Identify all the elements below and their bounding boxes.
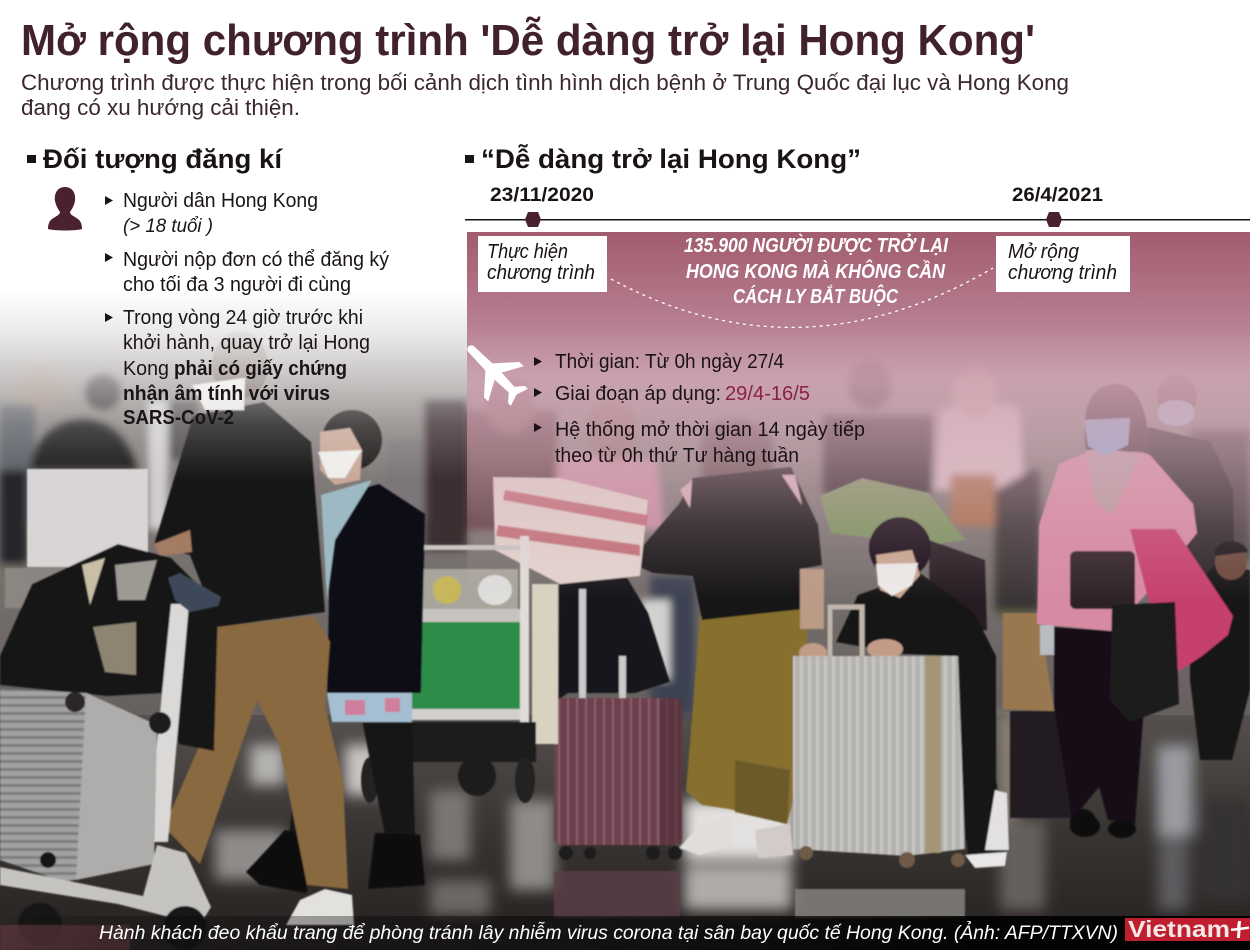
subtitle: Chương trình được thực hiện trong bối cảnh dịch tình hình dịch bệnh ở Trung Quốc đại lục và Hong Kong bbox=[21, 70, 1069, 95]
programme details text: Giai đoạn áp dụng: bbox=[555, 383, 721, 405]
programme details text: Hệ thống mở thời gian 14 ngày tiếp bbox=[555, 419, 865, 441]
timeline: 23/11/2020 bbox=[490, 185, 594, 206]
caption: Hành khách đeo khẩu trang để phòng tránh lây nhiễm virus corona tại sân bay quốc tế Hong Kong. (Ảnh: AFP/TTXVN) bbox=[99, 922, 1118, 944]
green blanket and dark luggage bbox=[820, 478, 965, 545]
man shirt and pants bbox=[164, 616, 348, 889]
trolley bbox=[147, 604, 189, 842]
black shopping bag bbox=[1110, 602, 1179, 722]
subtitle: đang có xu hướng cải thiện. bbox=[21, 95, 300, 120]
eligibility text: Trong vòng 24 giờ trước khi bbox=[123, 307, 363, 329]
callout: Mở rộng chương trình bbox=[996, 236, 1130, 292]
white box bbox=[27, 469, 148, 567]
blurred crowd behind bbox=[0, 361, 1250, 715]
cart, boxes and signs bbox=[532, 584, 558, 744]
left silver suitcase bbox=[0, 689, 157, 882]
callout: Mở rộng chương trình: chương trình bbox=[1008, 262, 1117, 284]
eligibility text: cho tối đa 3 người đi cùng bbox=[123, 274, 351, 296]
magenta coat bbox=[1130, 529, 1233, 671]
bullet triangles bbox=[105, 196, 113, 322]
girl bbox=[362, 720, 415, 835]
callout: Thực hiện chương trình: chương trình bbox=[487, 262, 595, 284]
heading: Đối tượng đăng kí: Đối tượng đăng kí bbox=[43, 144, 284, 174]
callout: 135.900 people: HONG KONG MÀ KHÔNG CẦN bbox=[686, 259, 945, 283]
cardboard box bbox=[1003, 613, 1054, 711]
heading: Dễ dàng trở lại Hong Kong: “Dễ dàng trở lại Hong Kong” bbox=[481, 143, 861, 174]
callout: 135.900 people bbox=[684, 233, 948, 308]
panel: Dễ dàng trở lại Hong Kong bbox=[451, 143, 1250, 467]
callout: Thực hiện chương trình bbox=[478, 236, 607, 292]
right woman pants bbox=[1054, 627, 1144, 824]
title: Mở rộng chương trình 'Dễ dàng trở lại Hong Kong' bbox=[21, 15, 1035, 65]
callout: Thực hiện chương trình: Thực hiện bbox=[487, 241, 568, 263]
callout: 135.900 people: 135.900 NGƯỜI ĐƯỢC TRỞ LẠI bbox=[684, 233, 948, 257]
programme details text: theo từ 0h thứ Tư hàng tuần bbox=[555, 445, 799, 467]
eligibility text: Người nộp đơn có thể đăng ký bbox=[123, 249, 389, 271]
trolley base bbox=[0, 845, 211, 925]
bullet triangles bbox=[534, 357, 542, 432]
eligibility text: Người dân Hong Kong bbox=[123, 190, 318, 212]
timeline: 26/4/2021 bbox=[1012, 185, 1103, 206]
shoes bbox=[679, 816, 733, 855]
eligibility text bbox=[123, 190, 389, 429]
programme details text: 29/4-16/5 bbox=[725, 383, 810, 405]
floor reflections bbox=[215, 712, 1250, 915]
center woman skirt bbox=[686, 609, 808, 824]
maroon suitcase bbox=[554, 698, 682, 845]
caption dark band bbox=[0, 916, 1250, 950]
pink overlay panel bbox=[467, 232, 1250, 600]
right background people bbox=[1148, 427, 1235, 610]
right woman jacket bbox=[1037, 451, 1197, 631]
eligibility text: phải có giấy chứng bbox=[174, 358, 347, 380]
eligibility text: nhận âm tính với virus bbox=[123, 383, 330, 405]
programme details text bbox=[555, 351, 865, 467]
dark suitcase bbox=[1010, 711, 1077, 818]
icon: airplane bbox=[451, 329, 537, 415]
black backpack bbox=[558, 576, 670, 700]
handbag bbox=[1070, 551, 1135, 609]
callout: Mở rộng chương trình: Mở rộng bbox=[1008, 241, 1079, 263]
callout: 135.900 people: CÁCH LY BẮT BUỘC bbox=[733, 284, 898, 308]
eligibility text: (> 18 tuổi ) bbox=[123, 216, 213, 237]
icon: person bbox=[48, 187, 82, 230]
programme details text: Thời gian: Từ 0h ngày 27/4 bbox=[555, 351, 784, 373]
bag on trolley bbox=[0, 544, 218, 751]
dotted arc bbox=[611, 268, 993, 327]
silver suitcase bbox=[830, 607, 862, 660]
eligibility text: SARS-CoV-2 bbox=[123, 407, 234, 429]
subtitle bbox=[21, 70, 1069, 120]
logo: Vietnam+: Vietnam bbox=[1128, 916, 1230, 942]
panel: Đối tượng đăng kí bbox=[27, 144, 389, 429]
timeline bbox=[465, 185, 1250, 227]
eligibility text: Kong bbox=[123, 358, 169, 380]
left white fade overlay bbox=[0, 0, 467, 480]
top white band bbox=[467, 0, 1250, 232]
eligibility text: khởi hành, quay trở lại Hong bbox=[123, 332, 370, 354]
boy bbox=[836, 573, 1007, 853]
center woman top bbox=[635, 467, 822, 620]
